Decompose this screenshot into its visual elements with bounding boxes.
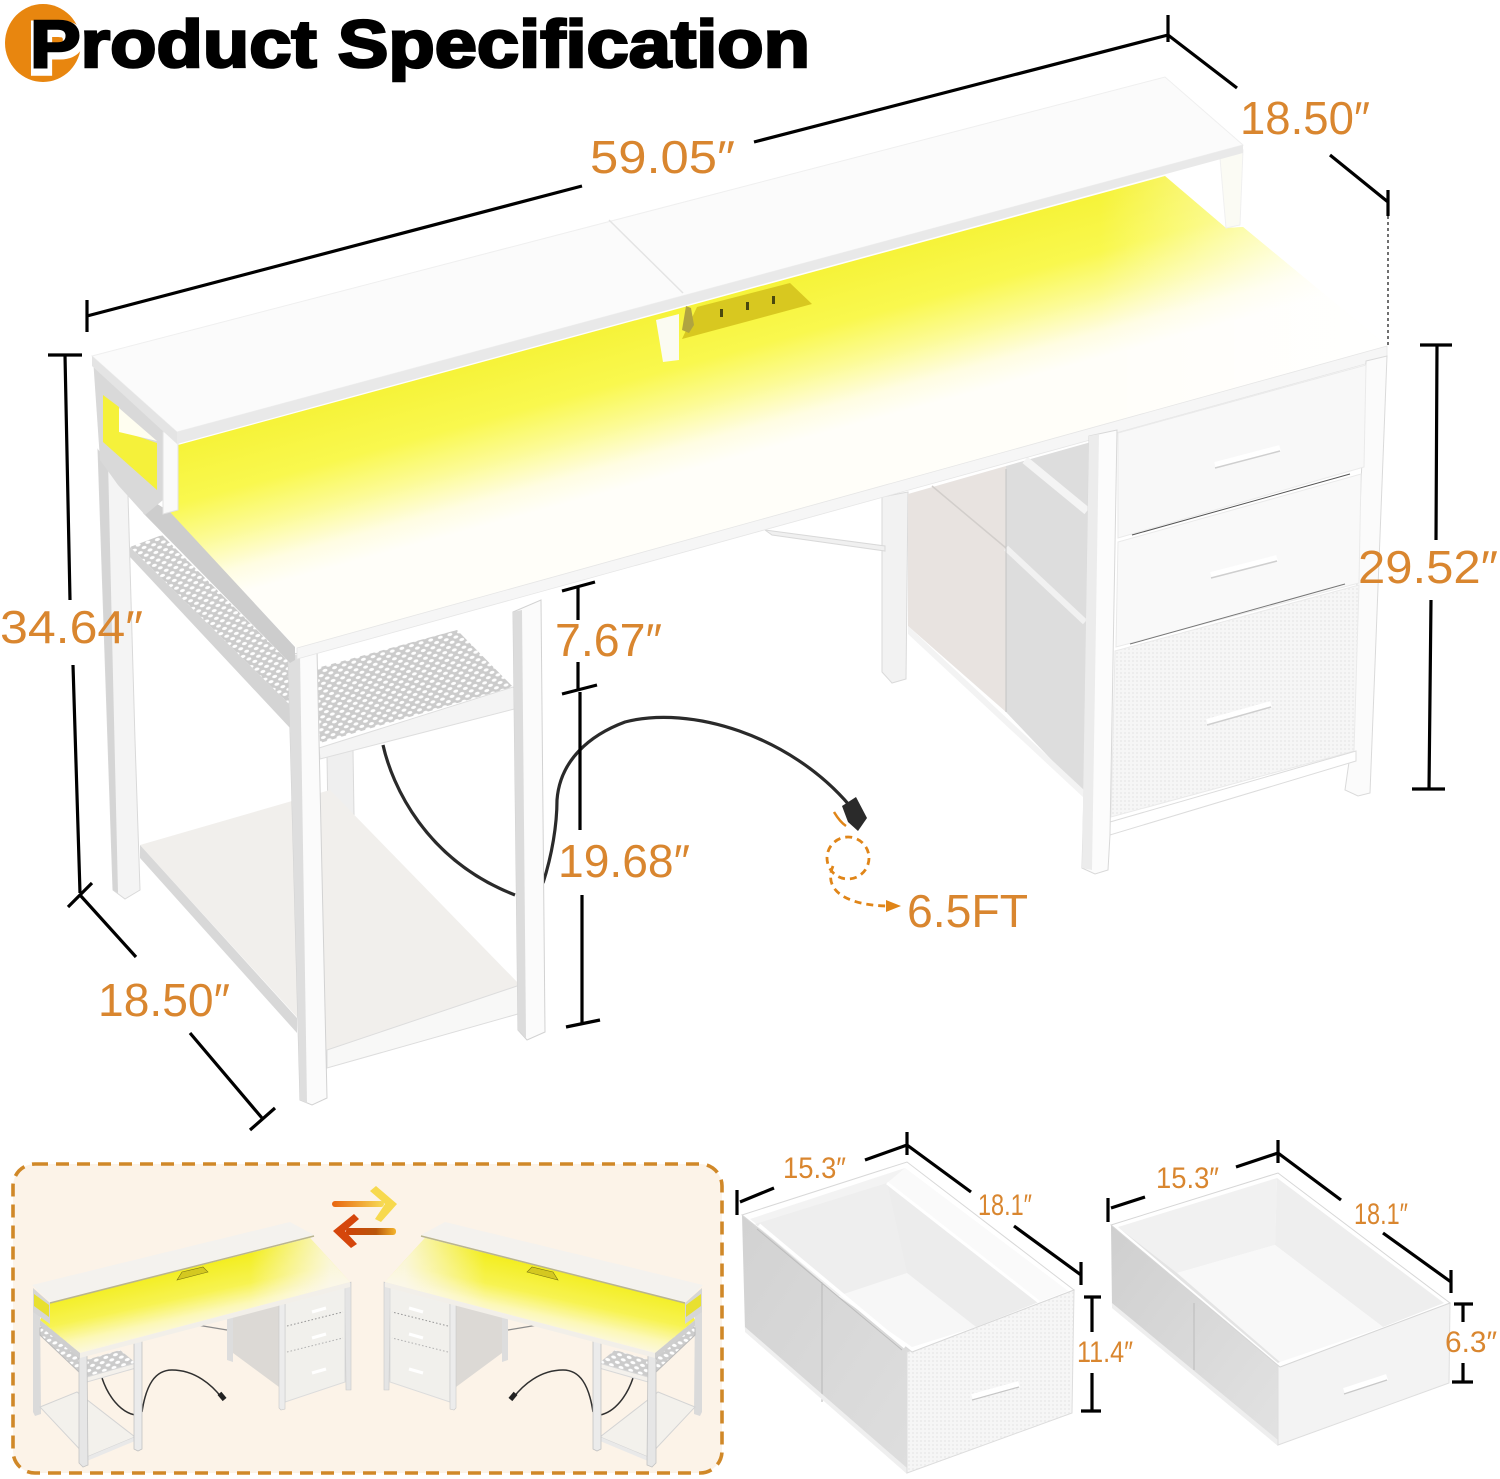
callout: 6.5FT cable — [827, 837, 1028, 937]
small fabric drawer — [1111, 1173, 1450, 1446]
rim — [1111, 1173, 1450, 1367]
cabinet fabric side — [908, 442, 1091, 798]
back left leg — [98, 450, 140, 899]
small drawer dimensions — [1108, 1140, 1497, 1382]
left post — [163, 428, 178, 514]
right post — [1220, 150, 1243, 228]
drawer middle — [1116, 474, 1361, 647]
interior — [750, 1168, 1068, 1347]
large fabric drawer — [742, 1162, 1074, 1474]
large drawer dimensions: 18.1″ — [978, 1189, 1032, 1222]
middle post — [656, 314, 679, 362]
rim — [742, 1162, 1074, 1352]
left metal beam — [143, 495, 295, 663]
handle 1 — [1215, 448, 1280, 465]
desktop with LED glow — [168, 176, 1387, 648]
front edge — [177, 145, 1243, 444]
desktop front edge — [297, 346, 1387, 659]
large drawer dimensions: 15.3″ — [783, 1152, 846, 1185]
dimension: 19.68 clearance: 19.68″ — [558, 835, 690, 887]
cabinet drawers — [1082, 356, 1387, 874]
dimension: 34.64 height: 34.64″ — [0, 601, 143, 653]
dimension: 7.67 clearance — [555, 582, 662, 694]
front left leg — [288, 650, 327, 1105]
drawer bottom — [1111, 585, 1359, 817]
middle mesh shelf — [317, 630, 522, 759]
drawer left side — [1111, 1225, 1280, 1445]
bottom shelf — [140, 790, 525, 1068]
dimension: 29.52 height — [1358, 345, 1498, 790]
bottom lip — [745, 1327, 907, 1474]
bottom rail — [1110, 751, 1356, 835]
left side frame — [93, 358, 177, 515]
interior — [1118, 1178, 1277, 1273]
small drawer dimensions: 15.3″ — [1156, 1162, 1219, 1195]
right desk layout — [384, 1222, 703, 1467]
monitor riser — [92, 77, 1243, 515]
left edge — [92, 356, 177, 444]
drawer front — [907, 1290, 1074, 1473]
handle 3 — [1207, 704, 1271, 722]
large drawer dimensions — [737, 1132, 1133, 1411]
heading: Product Specification — [30, 7, 810, 82]
large drawer dimensions: 11.4″ — [1077, 1336, 1133, 1369]
outlet strip — [682, 283, 812, 339]
dimension: 29.52 height: 29.52″ — [1358, 541, 1498, 593]
dimension: 7.67 clearance: 7.67″ — [555, 614, 662, 666]
dimension: 59.05 width: 59.05″ — [590, 131, 735, 183]
left mesh shelf — [130, 535, 290, 728]
crossbar — [765, 530, 885, 551]
title with orange badge: Product Specification — [31, 11, 811, 86]
small drawer dimensions: 6.3″ — [1445, 1326, 1497, 1359]
drawer front — [1278, 1303, 1450, 1445]
dimension: 18.50 depth top: 18.50″ — [1240, 92, 1370, 144]
dimension: 18.50 depth left: 18.50″ — [98, 974, 230, 1026]
callout: 6.5FT cable: 6.5FT — [907, 885, 1028, 937]
icon: plug — [834, 797, 867, 831]
handle — [972, 1384, 1019, 1400]
left desk layout — [32, 1222, 351, 1467]
power cable — [383, 717, 850, 895]
small drawer dimensions: 18.1″ — [1354, 1198, 1408, 1231]
dimension: 59.05 width — [87, 15, 1168, 332]
handle 2 — [1211, 558, 1277, 575]
arrow: swap right — [332, 1186, 397, 1222]
side window glow — [103, 395, 157, 490]
front cabinet leg — [1082, 430, 1117, 874]
drawer left side — [742, 1215, 912, 1473]
bottom lip — [1112, 1303, 1278, 1446]
handle — [1344, 1377, 1387, 1394]
front right leg — [513, 600, 545, 1040]
arrow: swap left — [333, 1214, 396, 1248]
dimension: 18.50 depth top — [1168, 35, 1388, 345]
inner leg — [327, 750, 354, 820]
divider — [887, 1183, 1039, 1302]
right cabinet leg — [1345, 356, 1387, 796]
main desk illustration — [92, 77, 1387, 1105]
panel: reversible layout — [13, 1164, 722, 1473]
dimension: 18.50 depth left — [68, 883, 275, 1130]
drawer top — [1118, 365, 1366, 538]
dimension: 34.64 height — [0, 355, 143, 893]
icon: orange badge — [5, 4, 81, 82]
dimension: 19.68 clearance — [558, 692, 690, 1027]
top board — [92, 77, 1243, 432]
cabinet back leg — [882, 492, 908, 683]
